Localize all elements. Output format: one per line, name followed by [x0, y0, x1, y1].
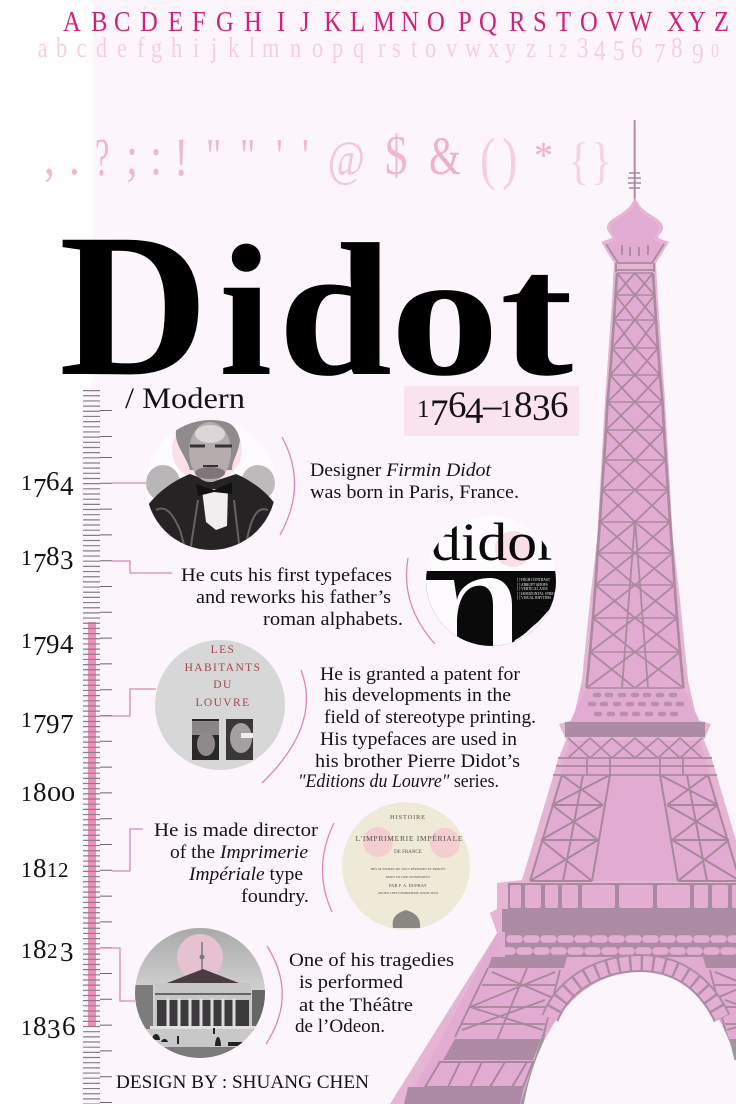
title: Didot: d	[278, 205, 392, 415]
year labels: 6	[46, 466, 60, 496]
text: director: of the Imprimerie	[170, 842, 308, 863]
year labels: 1	[21, 470, 32, 495]
punctuation row: *	[534, 135, 553, 177]
punctuation row: &	[429, 127, 461, 186]
year labels: 7	[60, 709, 74, 739]
lowercase alphabet and numerals: 9	[692, 38, 704, 70]
year labels: 1	[21, 938, 32, 963]
year labels: 9	[46, 709, 60, 739]
year labels: 1	[21, 1015, 32, 1040]
year labels: 4	[60, 471, 74, 501]
text: first typefaces: He cuts his first typefaces	[181, 565, 392, 586]
year labels: 7	[33, 709, 46, 739]
lowercase alphabet and numerals: 8	[671, 32, 683, 64]
lowercase alphabet and numerals: 1	[546, 39, 554, 61]
timeline ruler	[88, 390, 112, 1104]
photo: didot specimen: [ ] VISUAL RHYTHM	[517, 596, 551, 600]
year labels: 8	[33, 1011, 46, 1041]
punctuation row: ?	[95, 126, 109, 187]
lowercase alphabet and numerals: 5	[613, 35, 625, 67]
year labels: 1	[21, 781, 32, 806]
photo: Les Habitants du Louvre	[155, 640, 285, 770]
photo: histoire de l'imprimerie: MISES EN FONCTIONNEMENT	[386, 875, 430, 879]
second platform	[502, 883, 736, 957]
punctuation row	[44, 124, 612, 191]
year labels: 1	[21, 857, 32, 882]
punctuation row: "	[206, 130, 221, 183]
photo: didot specimen: didor	[431, 512, 557, 572]
photo: histoire de l'imprimerie: DES OUVRIERS DE TOUS PÉRIODES ET PROCÉS	[371, 866, 446, 871]
text: born in Paris: was born in Paris, France.	[310, 482, 519, 503]
text: director: foundry.	[241, 886, 309, 907]
lowercase alphabet and numerals: 4	[594, 35, 606, 67]
arch stones	[550, 963, 722, 1018]
arch opening	[524, 972, 736, 1104]
date box: 1	[417, 396, 430, 423]
photo: histoire de l'imprimerie: L'IMPRIMERIE IMPÉRIALE	[356, 833, 463, 843]
photo: didot specimen: [ ] HIGH CONTRAST	[517, 578, 551, 582]
eiffel tower	[390, 120, 736, 1104]
photo: Les Habitants du Louvre: LOUVRE	[195, 697, 251, 709]
year labels: 1	[21, 628, 32, 653]
text: first typefaces	[181, 565, 403, 630]
text: director: Impériale type	[188, 864, 303, 885]
punctuation row: )	[502, 127, 517, 191]
subtitle: Modern: / Modern	[125, 382, 245, 415]
photo: Les Habitants du Louvre: HABITANTS	[185, 662, 261, 674]
punctuation row: '	[276, 130, 283, 183]
year labels: 8	[33, 853, 46, 883]
text: patent: his developments in the	[324, 685, 511, 706]
text: director: He is made director	[154, 820, 319, 841]
punctuation row: ;	[126, 125, 138, 186]
title: Didot: i	[219, 208, 272, 416]
punctuation row: '	[302, 130, 309, 183]
tower antenna	[628, 120, 641, 200]
lowercase alphabet and numerals: abcdefghijklmnopqrstovwxyz	[38, 33, 536, 64]
text: born in Paris	[310, 460, 519, 503]
title: Didot: D	[59, 191, 209, 419]
title: Didot	[59, 191, 573, 419]
year labels: 7	[33, 631, 46, 661]
year labels: 8	[33, 934, 46, 964]
text: patent	[298, 664, 536, 792]
punctuation row: !	[174, 126, 188, 187]
lowercase alphabet and numerals: 6	[631, 32, 643, 64]
lowercase alphabet and numerals: 0	[711, 39, 719, 61]
punctuation row: (	[480, 127, 495, 191]
photo: didot specimen: [ ] ABRUPT SERIFS	[517, 583, 548, 587]
punctuation row: "	[240, 130, 255, 183]
text: born in Paris: Designer Firmin Didot	[310, 460, 492, 481]
year labels: 3	[60, 937, 74, 967]
photo: histoire de l'imprimerie: PAR F. A. DUPRAY	[389, 883, 428, 888]
date box: 3	[532, 388, 550, 429]
text: patent: field of stereotype printing.	[324, 707, 536, 728]
text: patent: his brother Pierre Didot’s	[315, 751, 520, 772]
rivet rows	[590, 695, 682, 714]
date box: 1	[500, 396, 512, 423]
year labels: 8	[46, 541, 60, 571]
year labels: 3	[47, 1014, 60, 1044]
punctuation row: .	[69, 125, 80, 186]
progress bar	[88, 622, 96, 1026]
year labels: 2	[58, 858, 68, 882]
photo: portrait of Firmin Didot	[146, 419, 276, 552]
year labels: 7	[33, 548, 46, 578]
date box	[404, 385, 579, 436]
photo: didot specimen: [ ] HORIZONTAL STRESS	[517, 592, 558, 596]
year labels: 1	[21, 545, 32, 570]
upper lattice	[586, 273, 684, 688]
photo: histoire de l'imprimerie	[342, 802, 470, 930]
punctuation row: ,	[44, 125, 55, 186]
text: tragedies: One of his tragedies	[289, 950, 454, 971]
punctuation row: @	[328, 131, 365, 186]
date box: 8	[514, 385, 532, 426]
text: first typefaces: and reworks his father’s	[196, 587, 391, 608]
lowercase alphabet and numerals: 2	[559, 39, 567, 61]
tower silhouette	[390, 198, 736, 1104]
text: director	[154, 820, 319, 907]
bracket arcs	[262, 437, 435, 1044]
date box: –	[482, 385, 502, 426]
text: tragedies	[289, 950, 454, 1037]
lowercase alphabet and numerals: 7	[654, 38, 666, 70]
photo: didot specimen	[426, 522, 556, 646]
date box: 6	[448, 385, 466, 426]
lower lattice	[404, 738, 736, 1104]
punctuation row: $	[385, 124, 407, 186]
photo: histoire de l'imprimerie: HISTOIRE	[390, 814, 426, 821]
year labels: 0	[47, 783, 61, 806]
year labels: 2	[47, 939, 58, 963]
text: first typefaces: roman alphabets.	[263, 609, 403, 630]
date box: 7	[430, 393, 448, 434]
photo: didot specimen: [ ] VERTICAL AXIS	[517, 587, 548, 591]
connector lines	[100, 483, 172, 1001]
text: patent: "Editions du Louvre" series.	[298, 771, 499, 792]
photo: theatre de l'Odeon	[135, 928, 266, 1058]
text: tragedies: de l’Odeon.	[295, 1016, 385, 1037]
text: tragedies: at the Théâtre	[299, 995, 413, 1016]
year labels: 6	[62, 1011, 76, 1041]
year labels: 9	[46, 629, 60, 659]
first platform band	[565, 722, 705, 737]
text: patent: He is granted a patent for	[320, 664, 521, 685]
title: Didot: t	[500, 218, 573, 413]
lowercase alphabet and numerals	[38, 32, 719, 70]
photo: histoire de l'imprimerie: DE FRANCE	[394, 850, 422, 855]
photo: Les Habitants du Louvre: DU	[213, 679, 233, 691]
date box: 4	[465, 391, 484, 432]
year labels: 7	[33, 473, 46, 503]
title: Didot: o	[390, 216, 499, 413]
year labels: 3	[60, 545, 74, 575]
lowercase alphabet and numerals: 3	[577, 32, 589, 64]
year labels: 1	[47, 858, 58, 882]
punctuation row: :	[150, 125, 162, 186]
year labels: 8	[33, 777, 46, 807]
text: patent: His typefaces are used in	[320, 729, 518, 750]
punctuation row: }	[591, 133, 612, 190]
year labels: 0	[61, 783, 75, 806]
photo: Les Habitants du Louvre: LES	[211, 644, 235, 656]
credit line: DESIGN BY : SHUANG CHEN	[116, 1072, 369, 1093]
uppercase alphabet: ABCDEFGHIJKLMNOPQRSTOVWXYZ	[63, 5, 729, 37]
photo: histoire de l'imprimerie: ANCIEN CHEF D'IMPRIMERIE, INSPECTEUR	[378, 891, 438, 896]
date box: 6	[550, 385, 568, 426]
text: tragedies: is performed	[299, 972, 404, 993]
year labels: 1	[21, 707, 32, 732]
punctuation row: {	[568, 133, 589, 190]
year labels: 4	[60, 629, 74, 659]
year labels	[21, 466, 76, 1044]
